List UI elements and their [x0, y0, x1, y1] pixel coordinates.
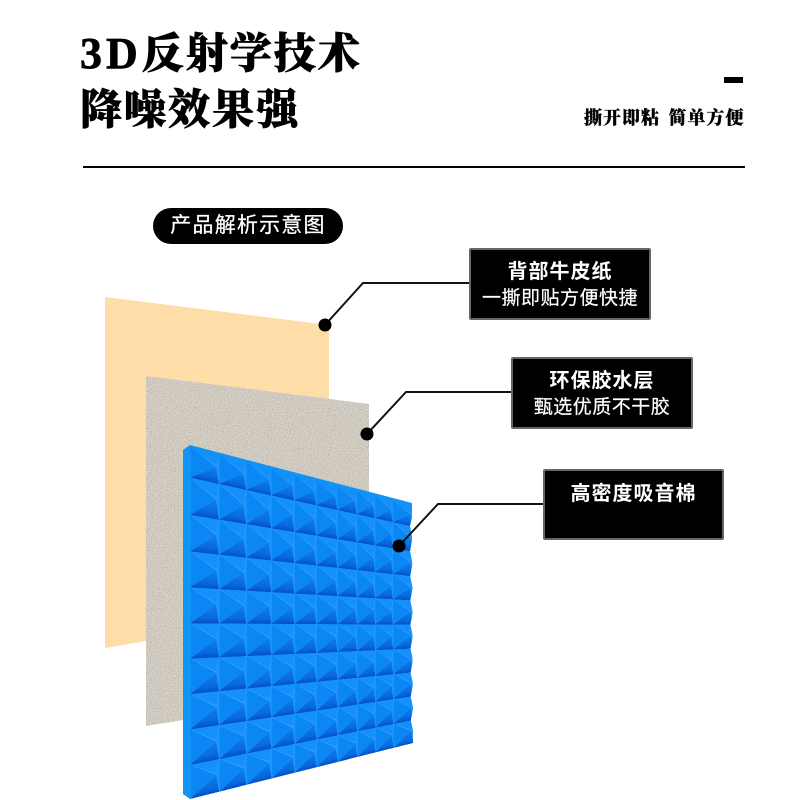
- foam side edge: [183, 445, 412, 799]
- subtitle: 撕开即粘 简单方便: [584, 108, 744, 128]
- layer: kraft paper backing: [105, 297, 329, 648]
- title line 2: 降噪效果强: [80, 88, 300, 134]
- callout: adhesive layer: [511, 357, 693, 429]
- layer: adhesive layer: [146, 376, 369, 726]
- callout title: 高密度吸音棉: [570, 483, 696, 505]
- callout title: 环保胶水层: [550, 370, 654, 392]
- pill heading: product diagram: 产品解析示意图: [170, 214, 326, 237]
- divider rule: [83, 166, 745, 168]
- title: [80, 29, 362, 134]
- callout title: 背部牛皮纸: [508, 261, 612, 283]
- callout: foam: [543, 469, 724, 540]
- leader line: kraft paper: [318, 282, 469, 332]
- foam pyramid grid: [190, 446, 413, 799]
- title line 1: 3D反射学技术: [80, 29, 362, 78]
- pill heading: product diagram: [153, 208, 343, 244]
- leader line: adhesive layer: [360, 391, 511, 440]
- layer: blue pyramid foam: [183, 445, 413, 799]
- callout description: 一撕即贴方便快捷: [482, 288, 638, 309]
- callout: kraft paper: [469, 248, 651, 320]
- leader line: foam: [392, 503, 543, 552]
- short dash mark: [724, 77, 743, 83]
- callout description: 甄选优质不干胶: [534, 397, 670, 418]
